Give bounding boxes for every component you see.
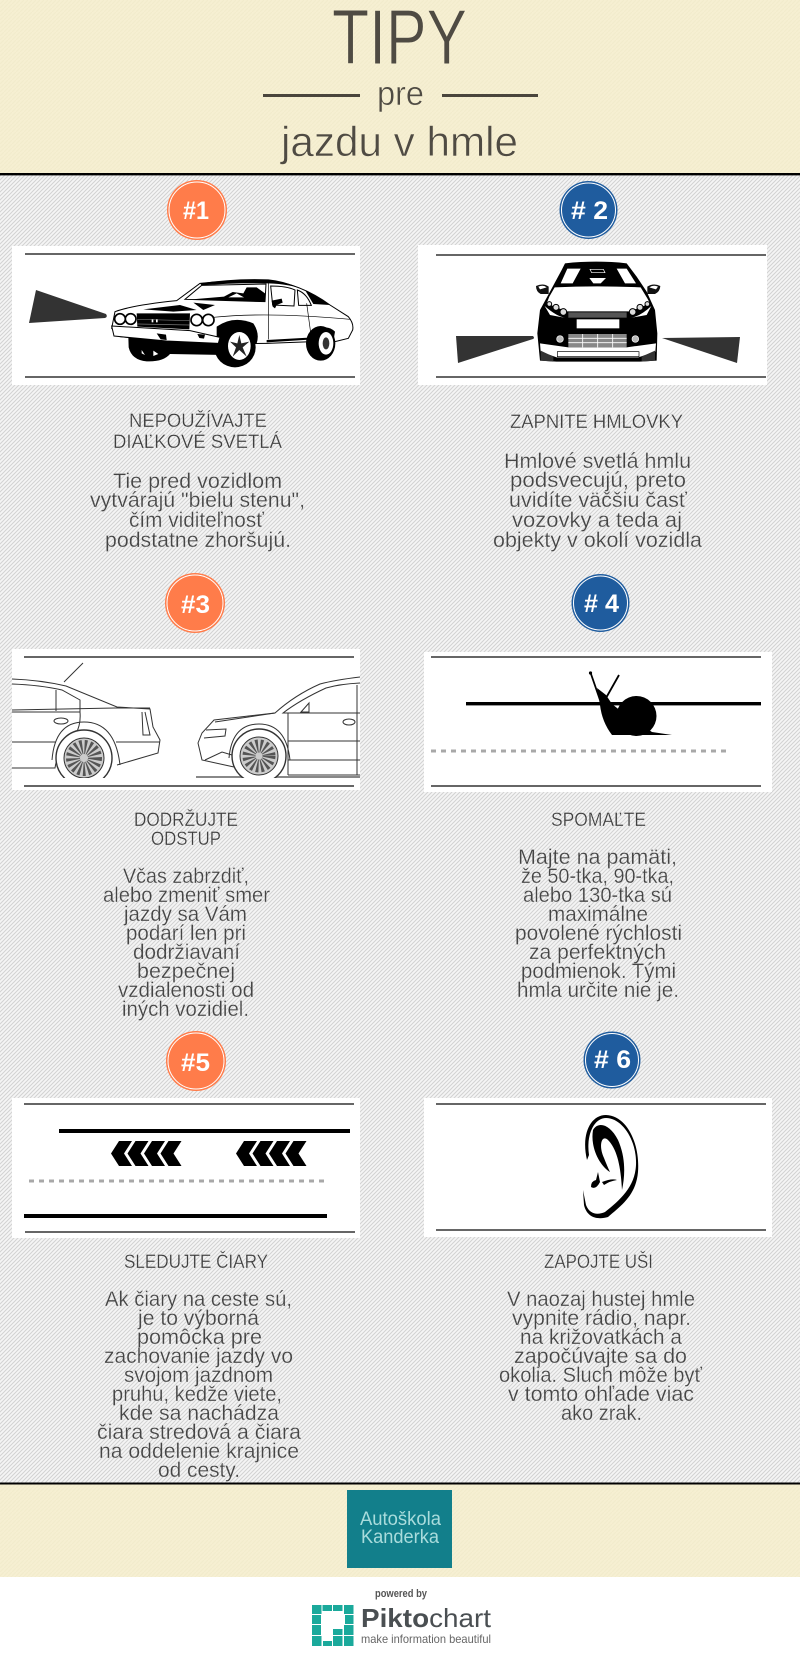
text block: tip 3: alebo zmeniť smer: [103, 884, 270, 907]
text block: tip 5: svojom jazdnom: [124, 1364, 273, 1387]
panel: two cars with gap: [12, 649, 360, 790]
subtitle: pre with side rules: pre: [377, 75, 424, 113]
badge #2: [560, 181, 618, 239]
text block: tip 4: podmienok. Tými: [521, 960, 676, 983]
text block: tip 6: na križovatkách a: [520, 1326, 682, 1349]
heading: use ears: ZAPOJTE UŠI: [544, 1250, 653, 1273]
text block: tip 3: vzdialenosti od: [118, 979, 254, 1002]
heading: high beams: NEPOUŽÍVAJTE: [129, 409, 267, 432]
text block: tip 1: podstatne zhoršujú.: [105, 529, 291, 552]
text block: tip 3: podarí len pri: [126, 922, 246, 945]
tip 6: [424, 1032, 772, 1425]
text block: tip 1: čím viditeľnosť: [129, 509, 265, 532]
text block: tip 2: uvidíte väčšiu časť: [509, 489, 688, 512]
badge #6: # 6: [594, 1046, 631, 1074]
text block: tip 6: [499, 1288, 703, 1425]
text block: tip 3: jazdy sa Vám: [123, 903, 247, 926]
heading: keep distance: DODRŽUJTE: [134, 808, 238, 831]
text block: tip 3: iných vozidiel.: [122, 998, 249, 1021]
icon: snail: [589, 671, 672, 736]
logo: Autoškola Kanderka: Kanderka: [361, 1527, 439, 1548]
text block: tip 1: vytvárajú "bielu stenu",: [90, 489, 305, 512]
text block: tip 4: hmla určite nie je.: [517, 979, 679, 1002]
icon: right fog beam: [662, 337, 740, 363]
text block: tip 3: [103, 865, 270, 1021]
icon: right chevrons: [236, 1141, 306, 1166]
text block: tip 5: kde sa nachádza: [119, 1402, 279, 1425]
heading: high beams: [113, 409, 282, 453]
text block: tip 4: že 50-tka, 90-tka,: [521, 865, 674, 888]
icon: left fog beam: [456, 336, 534, 363]
heading: keep distance: [134, 808, 238, 850]
icon: left chevrons: [111, 1141, 182, 1166]
panel: road lines: [12, 1098, 360, 1238]
tip 1: [12, 180, 360, 552]
logo: Autoškola Kanderka: [347, 1490, 452, 1568]
text block: tip 2: Hmlové svetlá hmlu: [504, 450, 691, 473]
text block: tip 1: Tie pred vozidlom: [113, 470, 282, 493]
text block: tip 4: Majte na pamäti,: [518, 846, 677, 869]
subtitle: jazdu v hmle: jazdu v hmle: [279, 118, 518, 165]
text block: tip 5: pruhu, kedže viete,: [112, 1383, 282, 1406]
heading: fog lights: ZAPNITE HMLOVKY: [510, 411, 683, 433]
text block: tip 6: V naozaj hustej hmle: [507, 1288, 695, 1311]
text block: tip 5: čiara stredová a čiara: [97, 1421, 301, 1444]
panel: ear: [424, 1098, 772, 1237]
heading: slow down: SPOMAĽTE: [551, 809, 646, 831]
tip 3: [12, 573, 360, 1021]
panel: car with fog lights: [418, 245, 767, 385]
text block: tip 6: v tomto ohľade viac: [508, 1383, 694, 1406]
badge #4: # 4: [584, 590, 619, 618]
text block: tip 5: na oddelenie krajnice: [99, 1440, 299, 1463]
text block: tip 5: [97, 1288, 301, 1482]
text block: tip 4: alebo 130-tka sú: [523, 884, 672, 907]
text block: tip 4: povolené rýchlosti: [515, 922, 682, 945]
icon: front car line art: [196, 677, 360, 783]
icon: muscle car: [112, 279, 353, 367]
text block: tip 3: bezpečnej: [137, 960, 235, 983]
tip 5: [12, 1031, 360, 1482]
icon: Piktochart mark: [312, 1605, 354, 1646]
icon: rear car line art: [12, 663, 160, 786]
Piktochart credit: [0, 1577, 800, 1657]
panel: snail on road: [424, 652, 772, 792]
text block: tip 2: vozovky a teda aj: [512, 509, 682, 532]
text block: tip 6: okolia. Sluch môže byť: [499, 1364, 703, 1387]
text block: tip 3: Včas zabrzdiť,: [123, 865, 249, 888]
text block: tip 1: [90, 470, 305, 552]
text block: tip 5: pomôcka pre: [137, 1326, 262, 1349]
heading: high beams: DIAĽKOVÉ SVETLÁ: [113, 430, 282, 453]
text block: tip 6: vypnite rádio, napr.: [512, 1307, 691, 1330]
heading: keep distance: ODSTUP: [151, 828, 221, 850]
badge #3: #3: [181, 591, 210, 619]
text block: tip 2: [493, 450, 702, 552]
text block: tip 4: za perfektných: [529, 941, 666, 964]
heading: follow lines: SLEDUJTE ČIARY: [124, 1250, 268, 1273]
footer band: [0, 1482, 800, 1577]
text block: tip 4: [515, 846, 682, 1002]
text block: tip 4: maximálne: [548, 903, 648, 926]
badge #1: [167, 180, 227, 240]
badge #2: # 2: [571, 197, 608, 225]
text block: tip 5: Ak čiary na ceste sú,: [105, 1288, 292, 1311]
text block: tip 5: je to výborná: [137, 1307, 259, 1330]
tip 2: [418, 181, 767, 552]
badge #5: [166, 1031, 226, 1091]
icon: ear: [583, 1115, 638, 1218]
icon: light beam: [29, 290, 107, 323]
text block: tip 5: zachovanie jazdy vo: [104, 1345, 293, 1368]
powered by: powered by: [375, 1588, 428, 1600]
badge #5: #5: [181, 1049, 210, 1077]
text block: tip 3: dodržiavaní: [133, 941, 240, 964]
wordmark: Piktochart: Piktochart: [361, 1603, 492, 1633]
logo: Autoškola Kanderka: Autoškola: [360, 1509, 441, 1530]
badge #6: [584, 1032, 640, 1088]
badge #1: #1: [183, 197, 209, 225]
text block: tip 6: započúvajte sa do: [514, 1345, 687, 1368]
text block: tip 6: ako zrak.: [561, 1402, 642, 1425]
tagline: make information beautiful: [361, 1632, 491, 1646]
subtitle: pre with side rules: [263, 75, 538, 113]
text block: tip 2: objekty v okolí vozidla: [493, 529, 702, 552]
icon: front view car: [536, 262, 660, 362]
panel: car with high beam: [12, 246, 360, 385]
striped page background: [0, 174, 800, 1484]
text block: tip 2: podsvecujú, preto: [510, 469, 686, 492]
badge #4: [572, 574, 630, 632]
header band: [0, 0, 800, 175]
tip 4: [424, 574, 772, 1002]
text block: tip 5: od cesty.: [158, 1459, 240, 1482]
badge #3: [165, 573, 225, 633]
